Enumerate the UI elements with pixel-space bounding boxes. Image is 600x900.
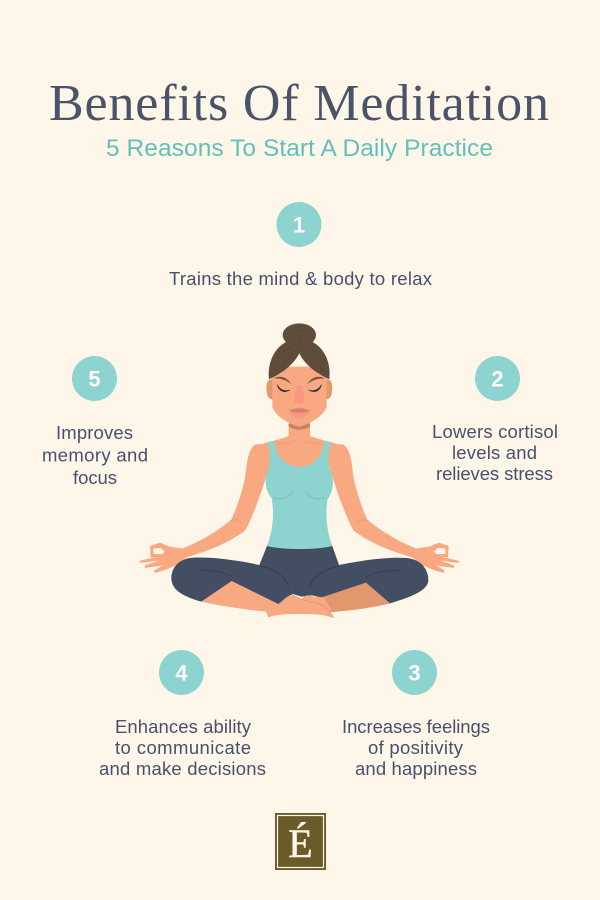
reason 1 — [169, 202, 433, 289]
shaded shin — [323, 583, 390, 612]
reason 4: Enhances ability — [115, 716, 252, 737]
foot contour — [302, 599, 331, 613]
lower legs — [201, 581, 390, 613]
nose — [294, 386, 305, 404]
hair bun — [283, 323, 316, 347]
reason 2 — [432, 356, 558, 484]
reason 2: 2 — [491, 366, 504, 392]
reason 2: Lowers cortisol — [432, 421, 558, 442]
ears — [266, 379, 332, 399]
reason 2: levels and — [452, 442, 537, 463]
reason 5: Improves — [56, 422, 133, 443]
left arm — [183, 443, 273, 557]
reason 3 — [342, 650, 490, 779]
trousers — [171, 546, 428, 604]
tank top — [266, 441, 333, 549]
brand logo — [275, 813, 326, 870]
title: Benefits Of Meditation — [49, 75, 549, 132]
reason 4: and make decisions — [99, 758, 266, 779]
reason 3: and happiness — [355, 758, 477, 779]
trouser creases — [198, 566, 400, 587]
reason 1: 1 — [293, 212, 305, 238]
reason 3: Increases feelings — [342, 716, 490, 737]
closed eyes — [277, 385, 321, 392]
reason 3: of positivity — [368, 737, 464, 758]
crossed feet — [266, 594, 334, 618]
reason 1: Trains the mind & body to relax — [169, 268, 433, 289]
neck and chest — [263, 423, 335, 470]
reason 4 — [99, 650, 266, 779]
face — [272, 367, 327, 427]
meditating woman illustration — [140, 323, 459, 618]
top details — [273, 492, 325, 499]
reason 3: 3 — [408, 660, 421, 686]
lips — [289, 408, 310, 419]
reason 5: memory and — [42, 444, 148, 466]
collarbones — [277, 440, 322, 443]
left hand — [140, 543, 187, 573]
neck shadow — [289, 423, 310, 430]
right hand — [411, 543, 459, 573]
right arm — [325, 443, 415, 557]
hair strands — [272, 330, 327, 373]
reason 4: 4 — [175, 660, 188, 686]
elbow creases — [230, 520, 369, 523]
hair — [269, 338, 330, 379]
reason 4: to communicate — [115, 737, 251, 758]
reason 5: focus — [73, 467, 117, 488]
subtitle: 5 Reasons To Start A Daily Practice — [106, 135, 493, 162]
upper foot — [302, 595, 331, 610]
reason 5: 5 — [88, 366, 101, 392]
brand logo: É — [288, 821, 313, 866]
upper lip — [289, 408, 310, 413]
eyebrows — [274, 377, 325, 384]
waistband shadow — [267, 546, 333, 550]
reason 5 — [42, 356, 148, 488]
reason 2: relieves stress — [436, 463, 553, 484]
